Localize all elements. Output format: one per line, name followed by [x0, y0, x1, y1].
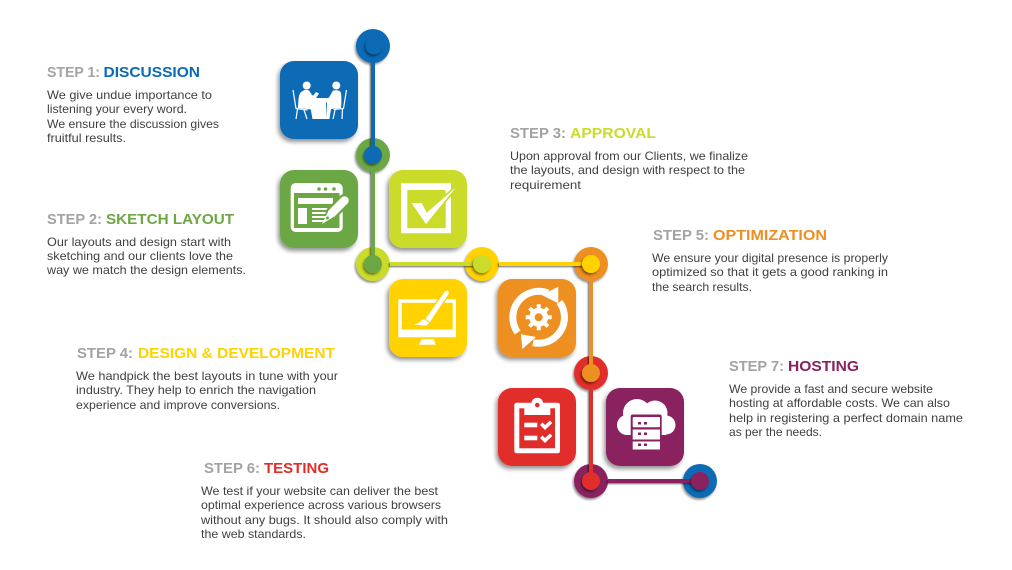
icon: sketch layout	[280, 170, 358, 248]
icon: testing clipboard	[498, 388, 576, 466]
text: step 3 approval: APPROVAL	[570, 125, 656, 142]
text: step 7 hosting	[729, 358, 963, 439]
node: red inner dot	[582, 472, 600, 490]
node: orange inner dot	[582, 364, 600, 382]
node: blue inner dot	[364, 146, 382, 164]
text: step 7 hosting: hosting at affordable costs. We can also	[729, 397, 950, 410]
text: step 3 approval: the layouts, and design with respect to the	[510, 164, 745, 177]
connector: green line	[371, 171, 375, 264]
text: step 5 optimization: OPTIMIZATION	[713, 227, 827, 244]
text: step 5 optimization: the search results.	[652, 281, 752, 294]
text: step 7 hosting: help in registering a perfect domain name	[729, 412, 963, 425]
text: step 7 hosting: as per the needs.	[729, 426, 822, 439]
text: step 6 testing: without any bugs. It should also comply with	[200, 514, 448, 527]
text: step 3 approval: Upon approval from our Clients, we finalize	[510, 150, 748, 163]
text: step 5 optimization	[652, 227, 888, 294]
icon: design monitor	[389, 279, 467, 357]
connector: blue line	[371, 62, 375, 155]
text: step 6 testing: STEP 6:	[204, 460, 260, 477]
node: lime inner dot	[473, 255, 491, 273]
text: step 3 approval: STEP 3:	[510, 125, 566, 142]
node: end blue circle	[683, 464, 717, 498]
node: purple inner dot	[691, 472, 709, 490]
text: step 7 hosting: HOSTING	[788, 358, 859, 375]
connector: red line	[589, 390, 593, 481]
text: step 1 discussion: We ensure the discussion gives	[47, 118, 219, 131]
icon: hosting cloud server	[606, 388, 684, 466]
text: step 6 testing: the web standards.	[201, 528, 306, 541]
text: step 5 optimization: optimized so that it gets a good ranking in	[652, 266, 888, 279]
text: step 1 discussion	[47, 64, 219, 145]
node: top blue circle	[356, 29, 390, 63]
text: step 2 sketch layout: Our layouts and design start with	[47, 236, 231, 249]
node: yellow inner dot	[582, 255, 600, 273]
text: step 4 design and development	[76, 345, 338, 412]
text: step 4 design and development: We handpick the best layouts in tune with your	[76, 370, 338, 383]
icon: optimization gear	[498, 279, 576, 357]
text: step 7 hosting: We provide a fast and secure website	[729, 383, 933, 396]
text: step 2 sketch layout: way we match the design elements.	[46, 264, 246, 277]
text: step 6 testing: We test if your website can deliver the best	[201, 485, 439, 498]
text: step 1 discussion: STEP 1:	[47, 64, 100, 81]
connector: orange line	[589, 281, 593, 373]
text: step 2 sketch layout: STEP 2:	[47, 211, 102, 228]
node: yellow circle	[465, 247, 499, 281]
text: step 3 approval	[510, 125, 748, 192]
text: step 4 design and development: STEP 4:	[77, 345, 133, 362]
text: step 5 optimization: STEP 5:	[653, 227, 709, 244]
text: step 6 testing: optimal experience across various browsers	[201, 499, 441, 512]
icon: approval checkbox	[389, 170, 467, 248]
node: lime circle	[356, 247, 390, 281]
connector: purple line	[608, 479, 700, 483]
node: red circle	[574, 356, 608, 390]
text: step 5 optimization: We ensure your digital presence is properly	[652, 252, 888, 265]
node: green inner dot	[364, 255, 382, 273]
icon: discussion	[280, 61, 358, 139]
text: step 7 hosting: STEP 7:	[729, 358, 784, 375]
node: green circle	[356, 138, 390, 172]
text: step 4 design and development: DESIGN & DEVELOPMENT	[138, 345, 335, 362]
text: step 1 discussion: listening your every word.	[47, 103, 187, 116]
node: orange circle	[574, 247, 608, 281]
text: step 2 sketch layout	[46, 211, 246, 277]
text: step 1 discussion: We give undue importance to	[47, 89, 212, 102]
text: step 1 discussion: fruitful results.	[47, 132, 126, 145]
text: step 3 approval: requirement	[510, 179, 582, 192]
connector: lime line	[390, 262, 482, 266]
text: step 6 testing	[200, 460, 448, 541]
text: step 6 testing: TESTING	[264, 460, 329, 477]
text: step 2 sketch layout: sketching and our clients love the	[47, 250, 233, 263]
node: purple circle	[574, 464, 608, 498]
text: step 1 discussion: DISCUSSION	[104, 64, 200, 81]
connector: yellow line	[499, 262, 591, 266]
text: step 4 design and development: industry. They help to enrich the navigation	[76, 384, 316, 397]
text: step 2 sketch layout: SKETCH LAYOUT	[106, 211, 234, 228]
text: step 4 design and development: experience and improve conversions.	[76, 399, 280, 412]
